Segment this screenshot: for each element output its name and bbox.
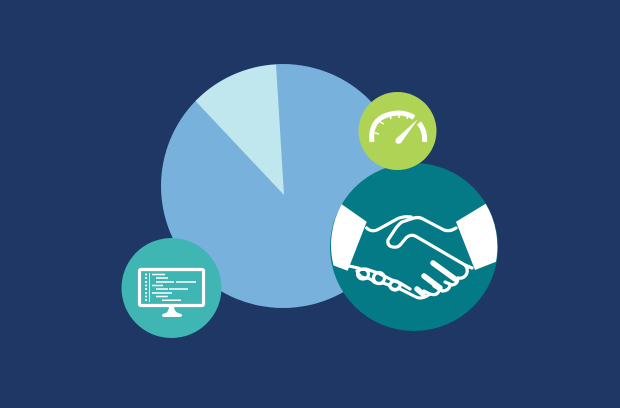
- icon: code lines: [145, 273, 196, 302]
- green circle with speedometer icon: [358, 92, 436, 170]
- turquoise circle with monitor icon: [122, 238, 222, 338]
- icon: gauge ticks: [375, 114, 408, 134]
- icon: monitor stand: [162, 306, 182, 317]
- icon: monitor frame: [140, 270, 204, 306]
- icon: fingers: [417, 263, 455, 294]
- pie slice: light wedge: [196, 64, 284, 195]
- teal circle with handshake icon: [330, 163, 498, 331]
- icon: right cuff: [456, 204, 497, 270]
- icon: gauge arc: [372, 113, 425, 142]
- icon: left cuff: [331, 204, 367, 271]
- icon: handshake outline: [349, 217, 472, 298]
- icon: gauge needle: [395, 119, 418, 144]
- pie chart: [161, 64, 405, 308]
